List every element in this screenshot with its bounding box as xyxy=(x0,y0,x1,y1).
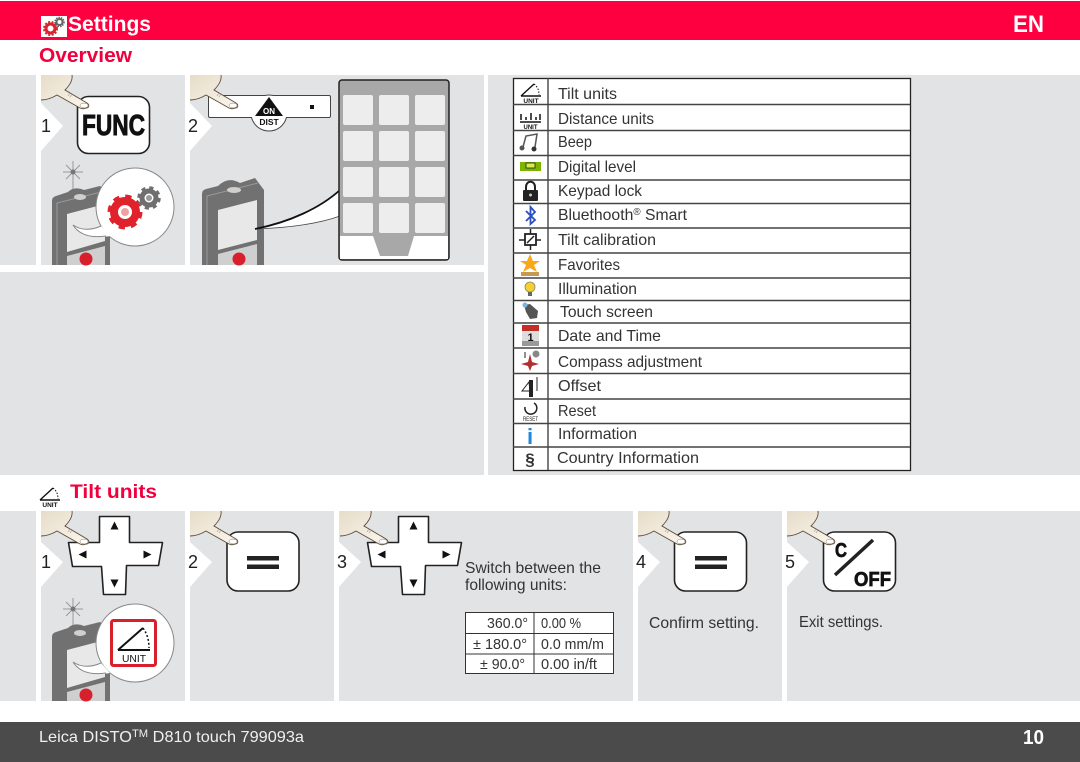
row: Touch screen: Touch screen xyxy=(560,304,653,321)
icon: hand xyxy=(41,511,89,545)
softkey strip: ON xyxy=(263,107,275,116)
row: Digital level xyxy=(520,159,636,176)
step marker 1 xyxy=(41,542,63,587)
row: Bluethooth Smart xyxy=(526,207,688,224)
row: Bluethooth Smart: Smart xyxy=(641,207,688,224)
panel: tilt step 3 xyxy=(337,511,614,674)
row: Illumination: Illumination xyxy=(558,281,637,298)
step marker 2 xyxy=(188,103,212,151)
panel: tilt step 5 xyxy=(785,511,896,631)
heading: Tilt units xyxy=(40,482,157,509)
row: Reset xyxy=(523,403,597,423)
step marker 5: 5 xyxy=(785,552,795,572)
row: Distance units xyxy=(520,111,654,131)
step marker 4: 4 xyxy=(636,552,646,572)
table: units xyxy=(465,612,614,674)
button: C/OFF xyxy=(824,532,896,591)
row: Tilt units xyxy=(521,84,617,105)
table: units: ± 180.0° xyxy=(473,636,527,653)
softkey strip: DIST xyxy=(259,117,279,127)
menu table xyxy=(513,78,910,470)
step marker 1 xyxy=(41,103,63,151)
device xyxy=(202,178,264,266)
panel: overview step 2 xyxy=(188,75,449,266)
panel: tilt step 2 xyxy=(188,511,299,591)
callout: settings gears xyxy=(73,168,174,246)
keypad screen xyxy=(339,80,449,260)
row: Country Information: § xyxy=(525,450,535,469)
button: navigation pad xyxy=(368,516,462,594)
row: Bluethooth Smart: Bluethooth xyxy=(558,207,635,224)
icon: tilt unit xyxy=(40,488,60,509)
step marker 3: 3 xyxy=(337,552,347,572)
row: Compass adjustment: Compass adjustment xyxy=(558,354,703,371)
row: Distance units: UNIT xyxy=(524,125,538,131)
row: Digital level: Digital level xyxy=(558,159,636,176)
row: Touch screen xyxy=(522,302,653,321)
step marker 2: 2 xyxy=(188,116,198,136)
footer text: Leica DISTO xyxy=(39,729,130,746)
text: switch units: following units: xyxy=(465,577,567,594)
row: Tilt units: Tilt units xyxy=(558,86,617,103)
icon: gray gear xyxy=(139,188,159,208)
row: Information: Information xyxy=(558,426,637,443)
panel: tilt units background xyxy=(0,511,1080,701)
row: Date and Time xyxy=(522,325,661,346)
text: switch units: Switch between the xyxy=(465,560,601,577)
icon: hand xyxy=(340,511,388,545)
panel: overview background xyxy=(0,75,1080,475)
icon: hand xyxy=(190,75,238,109)
icon: hand xyxy=(787,511,835,545)
icon: hand xyxy=(41,75,89,109)
icon: settings gears xyxy=(41,16,67,37)
row: Beep xyxy=(520,134,592,152)
button: navigation pad xyxy=(68,516,162,594)
table: units: ± 90.0° xyxy=(480,656,525,673)
icon: unit tile: UNIT xyxy=(122,654,146,665)
step marker 3 xyxy=(337,542,361,587)
icon: hand xyxy=(638,511,686,545)
device xyxy=(52,186,110,266)
row: Reset: RESET xyxy=(523,417,538,423)
row: Tilt calibration xyxy=(519,229,656,250)
language tag: EN xyxy=(1013,11,1044,38)
icon: laser xyxy=(63,598,83,626)
row: Tilt calibration: Tilt calibration xyxy=(558,232,656,249)
table: units: 0.00 in/ft xyxy=(541,656,598,673)
row: Compass adjustment xyxy=(521,350,703,371)
row: Distance units: Distance units xyxy=(558,111,654,128)
text: switch units xyxy=(465,560,601,594)
icon: hand xyxy=(190,511,238,545)
button: C/OFF: C xyxy=(835,540,847,562)
row: Favorites: Favorites xyxy=(558,257,620,274)
row: Reset: Reset xyxy=(558,403,597,420)
heading: Tilt units: Tilt units xyxy=(70,482,157,503)
row: Information: i xyxy=(527,424,533,449)
device xyxy=(52,622,110,702)
row: Offset xyxy=(522,377,602,397)
softkey strip xyxy=(208,95,330,131)
button: FUNC: FUNC xyxy=(82,110,145,142)
step marker 1: 1 xyxy=(41,116,51,136)
step marker 1: 1 xyxy=(41,552,51,572)
footer text: TM xyxy=(132,728,148,740)
icon: red gear xyxy=(110,197,140,227)
button: equals xyxy=(674,532,746,591)
heading: Overview: Overview xyxy=(39,45,132,67)
row: Date and Time: 1 xyxy=(527,332,534,344)
table: units: 360.0° xyxy=(487,615,528,632)
row: Keypad lock xyxy=(523,182,643,201)
panel: tilt step 1 xyxy=(41,511,174,702)
row: Date and Time: Date and Time xyxy=(558,328,661,345)
icon: laser xyxy=(63,161,83,189)
footer text: D810 touch 799093a xyxy=(148,729,304,746)
title: Settings: Settings xyxy=(68,13,151,36)
page number: 10 xyxy=(1023,727,1044,749)
row: Bluethooth Smart: ® xyxy=(633,207,641,218)
table: units: 0.0 mm/m xyxy=(541,636,604,653)
button: C/OFF: OFF xyxy=(854,569,891,591)
button: FUNC xyxy=(78,96,150,154)
footer xyxy=(0,722,1080,762)
text: exit: Exit settings. xyxy=(799,614,883,631)
panel: tilt step 4 xyxy=(636,511,759,632)
row: Offset: Offset xyxy=(558,378,602,395)
text: confirm: Confirm setting. xyxy=(649,615,759,632)
row: Country Information: Country Information xyxy=(557,450,699,467)
callout: tilt unit icon xyxy=(73,604,174,682)
header band xyxy=(0,1,1080,40)
panel: overview step 1 xyxy=(41,75,174,266)
row: Favorites xyxy=(520,254,620,276)
table: units: 0.00 % xyxy=(541,615,581,632)
callout: pointer to keypad xyxy=(255,190,340,229)
button: equals xyxy=(227,532,299,591)
step marker 2: 2 xyxy=(188,552,198,572)
row: Information xyxy=(527,424,637,449)
row: Beep: Beep xyxy=(558,134,592,151)
row: Keypad lock: Keypad lock xyxy=(558,183,643,200)
row: Illumination xyxy=(525,281,637,298)
